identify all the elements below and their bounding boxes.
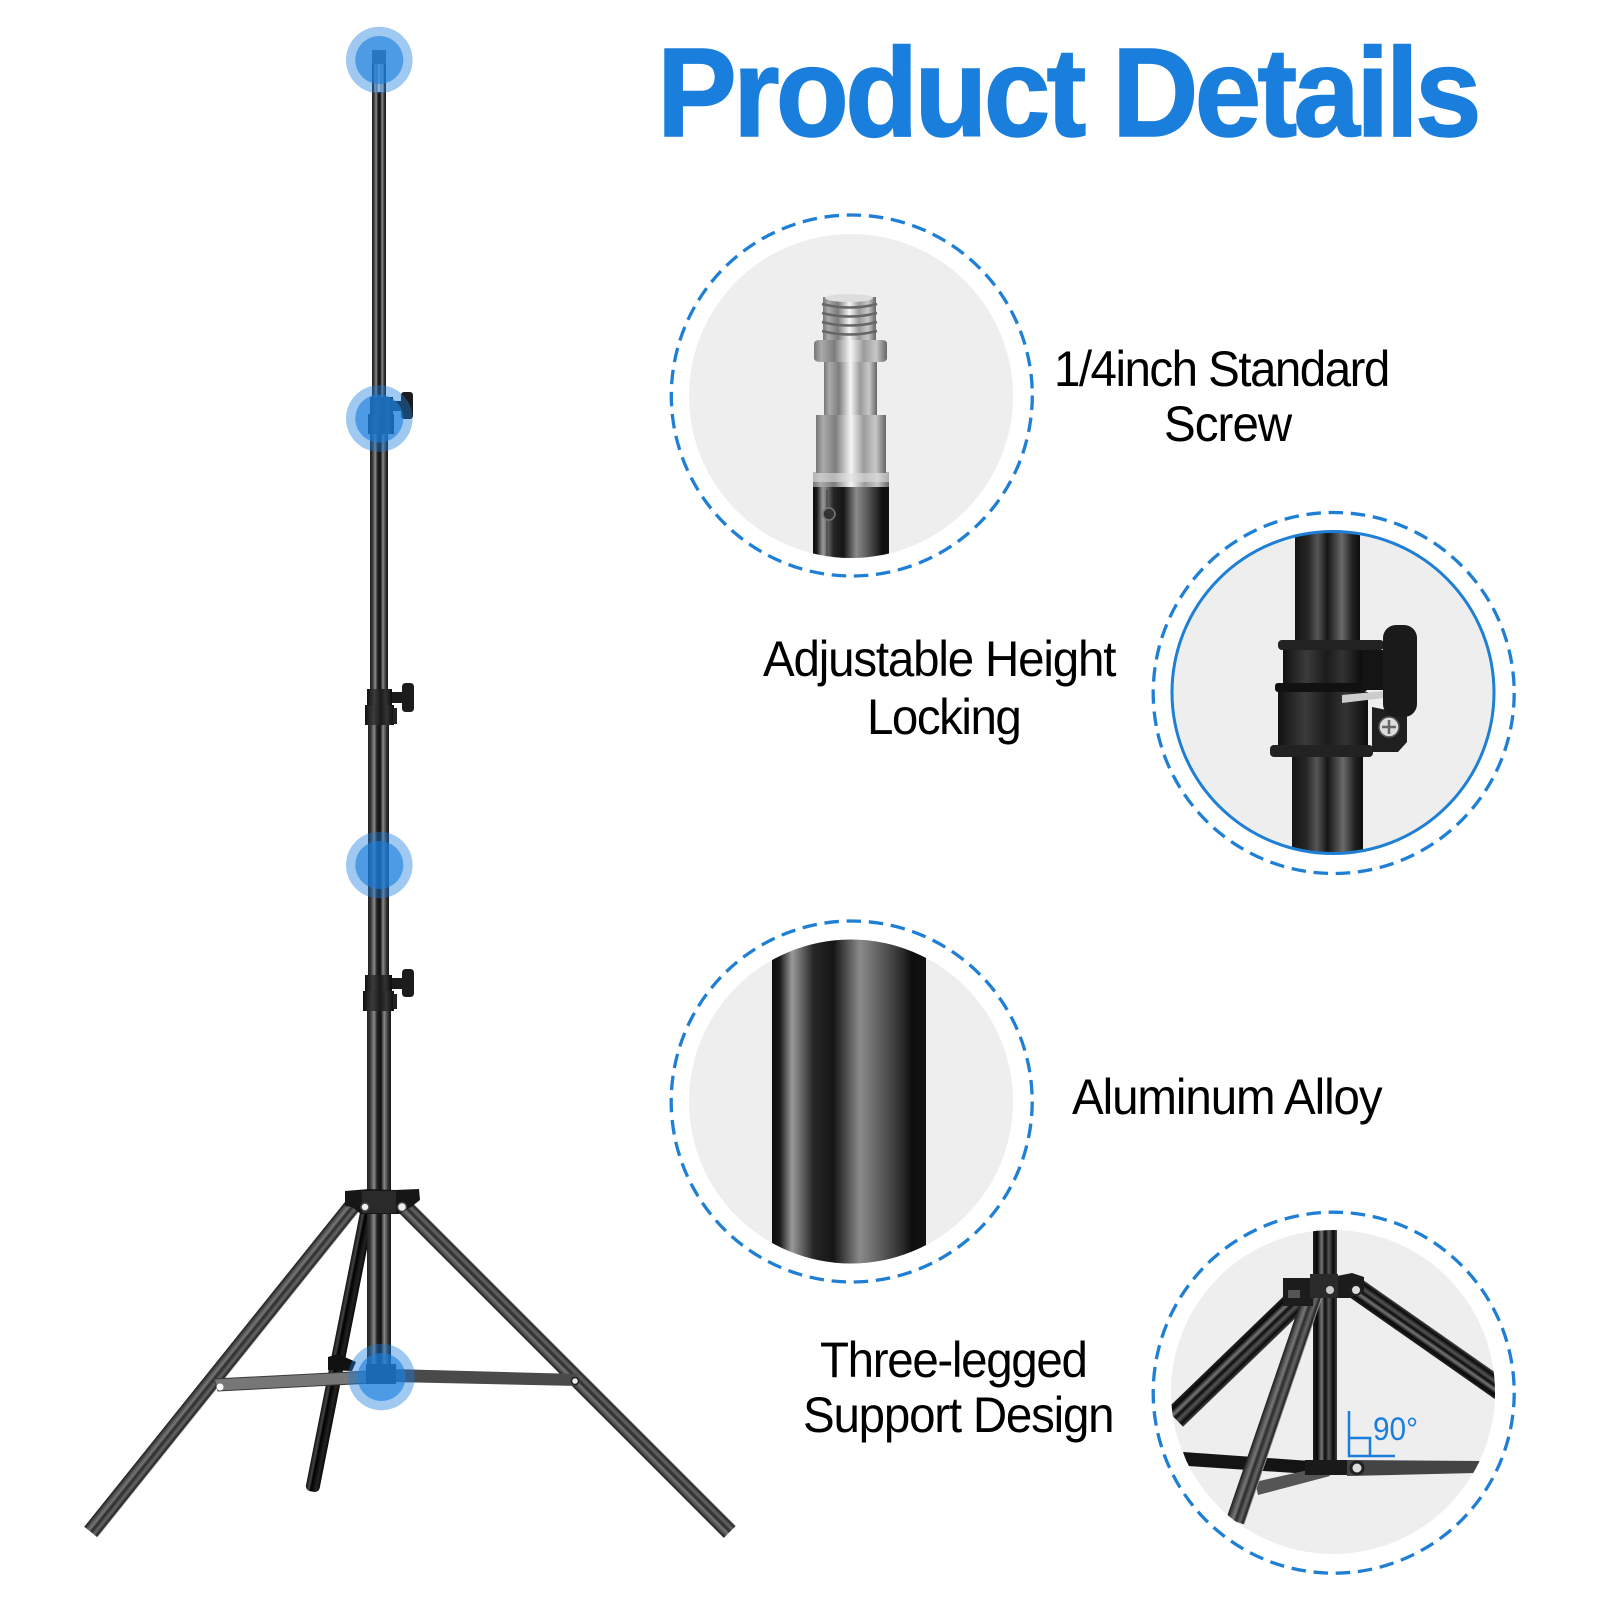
back leg — [305, 1207, 375, 1493]
label: tripod base — [803, 1333, 1115, 1443]
label: screw: 1/4inch Standard — [1054, 342, 1390, 397]
label: screw: Screw — [1164, 397, 1293, 452]
label: tripod base: Three-legged — [820, 1333, 1088, 1388]
aluminum tube — [772, 930, 926, 1270]
90 degree marker: 90° — [1373, 1411, 1418, 1447]
tripod stand — [84, 50, 736, 1538]
marker: height lock — [346, 385, 413, 452]
marker: aluminum tube — [346, 832, 413, 898]
clamp 1 — [368, 392, 413, 434]
hub — [345, 1189, 420, 1214]
label: height lock — [763, 632, 1117, 745]
marker: leg base — [348, 1344, 415, 1410]
left brace — [214, 1371, 372, 1391]
panel: height lock detail — [1153, 512, 1514, 874]
label: height lock: Locking — [867, 690, 1022, 745]
label: height lock: Adjustable Height — [763, 632, 1117, 687]
screw illustration — [813, 294, 889, 567]
lower hub — [366, 1364, 396, 1384]
panel: screw detail — [671, 215, 1032, 576]
right leg — [396, 1198, 736, 1538]
right brace — [392, 1369, 578, 1386]
panel: aluminum detail — [671, 921, 1032, 1282]
label: screw — [1054, 342, 1390, 452]
center pole — [367, 50, 391, 1380]
lock illustration — [1270, 530, 1417, 857]
marker: top screw — [346, 27, 413, 93]
label: tripod base: Support Design — [803, 1388, 1115, 1443]
label: aluminum: Aluminum Alloy — [1072, 1070, 1383, 1125]
clamp 2 — [365, 683, 414, 725]
brace pivots — [216, 1378, 578, 1390]
90 degree marker — [1349, 1411, 1418, 1456]
base illustration — [1166, 1225, 1516, 1524]
left leg — [84, 1193, 365, 1537]
panel: tripod base detail — [1153, 1212, 1516, 1573]
title: Product Details — [657, 23, 1482, 164]
clamp 3 — [363, 969, 414, 1011]
